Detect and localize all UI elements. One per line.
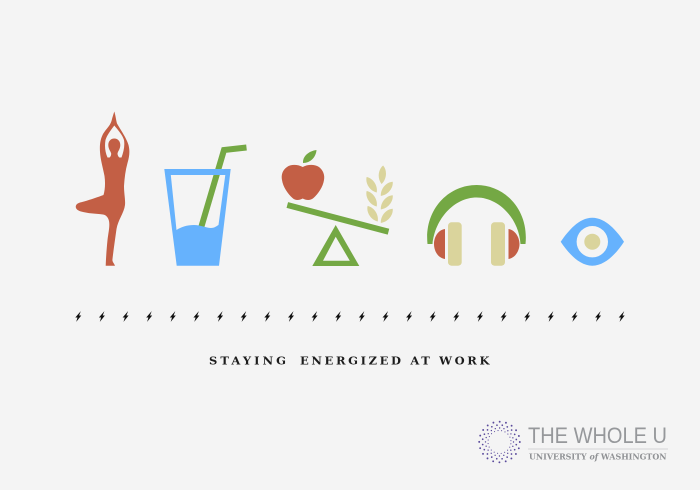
apple leaf: [303, 150, 316, 163]
title: ENERGIZED AT WORK: [300, 354, 490, 368]
glass outline: [164, 169, 231, 266]
title: [209, 354, 490, 368]
ear cups: [434, 229, 520, 259]
balance fulcrum: [312, 225, 359, 266]
logo: wordmark: THE WHOLE U: [528, 423, 667, 448]
icon: yoga tree pose figure: [76, 112, 129, 266]
apple: [282, 165, 324, 200]
ear pads: [448, 222, 462, 266]
logo: The Whole U, University of Washington: [479, 422, 668, 462]
icon: headphones: [427, 185, 526, 266]
icon: apple and wheat on balance: [282, 150, 395, 266]
row of lightning bolts: [75, 311, 625, 322]
logo: radial dot mark: [479, 422, 520, 462]
arm gap: [105, 126, 124, 158]
straw: [201, 148, 246, 228]
headband: [427, 185, 526, 244]
wheat: [364, 165, 395, 225]
title: STAYING: [209, 354, 286, 368]
logo: university name: UNIVERSITY of WASHINGTON: [529, 452, 666, 462]
logo divider: [528, 448, 668, 450]
icon: glass of water with straw: [164, 148, 246, 266]
icon: eye: [561, 218, 624, 266]
head: [108, 138, 120, 158]
balance beam: [287, 205, 388, 232]
